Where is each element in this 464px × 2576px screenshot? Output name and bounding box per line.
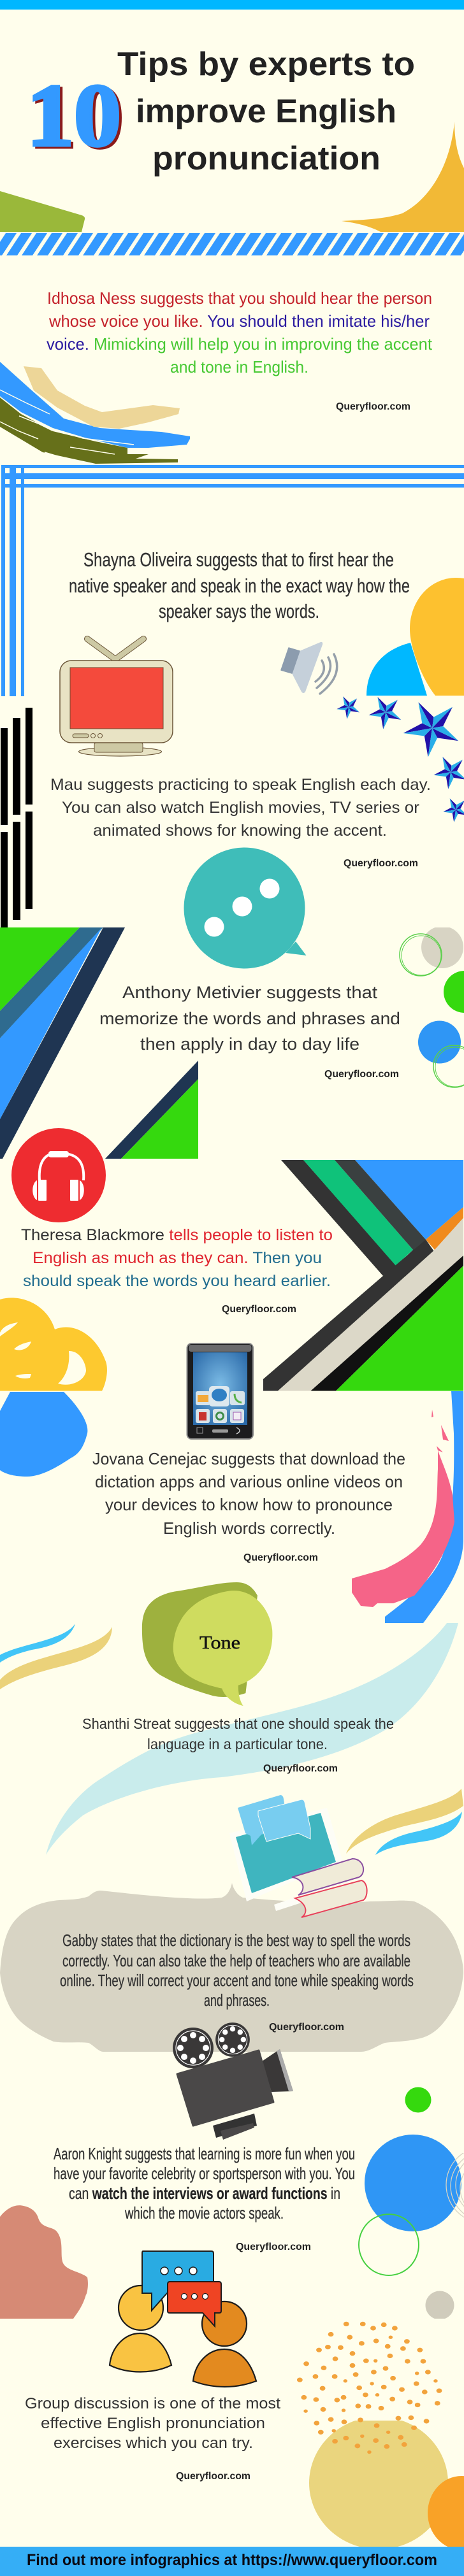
decorative yellow shape <box>342 122 464 232</box>
tip 3 text: animated shows for knowing the accent. <box>93 822 387 840</box>
source credit: Queryfloor.com <box>336 401 410 412</box>
speech bubble blue <box>142 2251 214 2310</box>
tip 10 text: effective English pronunciation <box>41 2415 265 2432</box>
panel: tip 6 Jovana Cenejac <box>92 1449 405 1563</box>
decorative yellow cloud <box>0 1298 107 1391</box>
frame: blue corner lines <box>1 465 464 696</box>
tip 5 text: should speak the words you heard earlier. <box>23 1272 331 1290</box>
speech bubble red <box>168 2282 221 2326</box>
decorative orange dots <box>297 2322 442 2454</box>
decorative waves left <box>0 1624 112 1689</box>
person orange <box>193 2301 256 2387</box>
footer bar <box>0 2547 464 2576</box>
source credit: Queryfloor.com <box>243 1552 318 1563</box>
tip 8 text <box>60 1931 414 2010</box>
decorative waves right <box>346 1789 463 1855</box>
brush strokes <box>0 362 190 464</box>
tip 4 text: memorize the words and phrases and <box>99 1009 400 1028</box>
tip 7 text: Shanthi Streat suggests that one should speak the <box>82 1715 394 1732</box>
panel: tip 7 Shanthi Streat <box>82 1715 394 1774</box>
tip 9 text: can watch the interviews or award functions in <box>69 2184 340 2203</box>
tip 10 text: Group discussion is one of the most <box>25 2395 280 2412</box>
panel: beige scalloped banner <box>0 1883 463 2052</box>
decorative yellow and orange circles <box>309 2417 464 2550</box>
title text: improve English <box>136 93 396 130</box>
title text: pronunciation <box>152 140 381 177</box>
source credit: Queryfloor.com <box>324 1069 399 1080</box>
panel: tip 1 Idhosa Ness <box>0 289 433 464</box>
tip 1 text: and tone in English. <box>170 357 308 376</box>
panel: tip 5 Theresa Blackmore <box>21 1226 333 1315</box>
panel: tip 3 Mau <box>50 776 431 869</box>
icon: smartphone <box>187 1343 253 1439</box>
panel: tip 8 Gabby <box>60 1931 414 2033</box>
tip 10 text: exercises which you can try. <box>54 2435 253 2452</box>
panel: title <box>0 46 464 232</box>
tip 7 text <box>82 1715 394 1752</box>
panel: tip 2 Shayna Oliveira <box>69 548 410 622</box>
tip 4 text: then apply in day to day life <box>140 1034 359 1054</box>
bubble label: Tone <box>199 1633 240 1653</box>
tip 8 text: and phrases. <box>204 1991 270 2010</box>
icon: film camera <box>173 2022 293 2140</box>
icon: tone speech bubble <box>142 1582 272 1706</box>
title text <box>117 46 415 177</box>
tip 5 text: Theresa Blackmore tells people to listen to <box>21 1226 333 1244</box>
footer text: Find out more infographics at https://www.queryfloor.com <box>27 2551 437 2569</box>
tip 1 text <box>47 289 433 376</box>
decorative pale blue swoosh <box>46 1623 458 1855</box>
decorative geometric triangles left <box>0 927 198 1159</box>
tip 6 text: Jovana Cenejac suggests that download the <box>92 1449 405 1468</box>
source credit: Queryfloor.com <box>176 2471 250 2482</box>
tip 1 text: voice. Mimicking will help you in improving the accent <box>47 334 433 354</box>
tip 6 text: your devices to know how to pronounce <box>105 1495 393 1514</box>
tip 4 text <box>99 983 400 1054</box>
tip 9 text: have your favorite celebrity or sportsperson with you. You <box>54 2164 355 2183</box>
decorative geometric bands right <box>263 1160 463 1391</box>
tip 4 text: Anthony Metivier suggests that <box>122 983 378 1002</box>
tip 9 text <box>54 2144 355 2222</box>
tip 3 text: You can also watch English movies, TV series or <box>62 799 419 817</box>
source credit: Queryfloor.com <box>236 2242 311 2252</box>
tip 5 text <box>21 1226 333 1290</box>
decorative blue circle and rings <box>359 2135 464 2275</box>
decorative blue and pink paint strokes <box>352 1391 463 1623</box>
tip 5 text: English as much as they can. Then you <box>33 1249 322 1267</box>
panel: tip 2 Shayna Oliveira: speaker says the words. <box>159 600 319 622</box>
icons: stars <box>333 689 464 824</box>
icon: speaker <box>281 642 337 694</box>
top colour bar <box>0 0 464 10</box>
icon: red headphones <box>11 1128 106 1222</box>
tip 6 text: English words correctly. <box>163 1519 335 1538</box>
source credit: Queryfloor.com <box>222 1304 296 1315</box>
number 10: 10 <box>29 68 124 167</box>
tip 7 text: language in a particular tone. <box>147 1736 328 1752</box>
icon: teal speech bubble <box>184 847 306 968</box>
panel: tip 10 group discussion <box>25 2395 280 2482</box>
panel: tip 4 Anthony Metivier <box>99 983 400 1080</box>
decorative circles right <box>400 926 464 1087</box>
icon: group discussion <box>110 2251 256 2387</box>
decorative blue blob <box>0 1392 87 1477</box>
tip 6 text <box>92 1449 405 1538</box>
icon: dictionary picture and books <box>229 1795 367 1917</box>
tip 1 text: whose voice you like. You should then imitate his/her <box>48 311 430 331</box>
source credit: Queryfloor.com <box>269 2022 344 2033</box>
striped divider <box>0 233 464 255</box>
decorative grey dot <box>426 2291 454 2320</box>
person yellow <box>110 2286 171 2372</box>
source credit: Queryfloor.com <box>263 1763 338 1774</box>
decorative black bars <box>1 708 33 927</box>
number 10: 10 <box>27 66 121 165</box>
decorative heart shape <box>366 578 464 696</box>
decorative green dot <box>405 2087 431 2112</box>
tip 3 text: Mau suggests practicing to speak English each day. <box>50 776 431 794</box>
icon: retro television <box>60 639 173 756</box>
source credit: Queryfloor.com <box>344 858 418 869</box>
tip 6 text: dictation apps and various online videos on <box>95 1472 403 1491</box>
title text: Tips by experts to <box>117 46 415 83</box>
decorative salmon blob <box>0 2205 88 2319</box>
tip 3 text <box>50 776 431 840</box>
decorative green shape <box>0 191 85 232</box>
tip 10 text <box>25 2395 280 2452</box>
tip 9 text: which the movie actors speak. <box>124 2203 284 2222</box>
tip 1 text: Idhosa Ness suggests that you should hear the person <box>47 289 432 308</box>
panel: tip 9 Aaron Knight <box>54 2144 355 2252</box>
